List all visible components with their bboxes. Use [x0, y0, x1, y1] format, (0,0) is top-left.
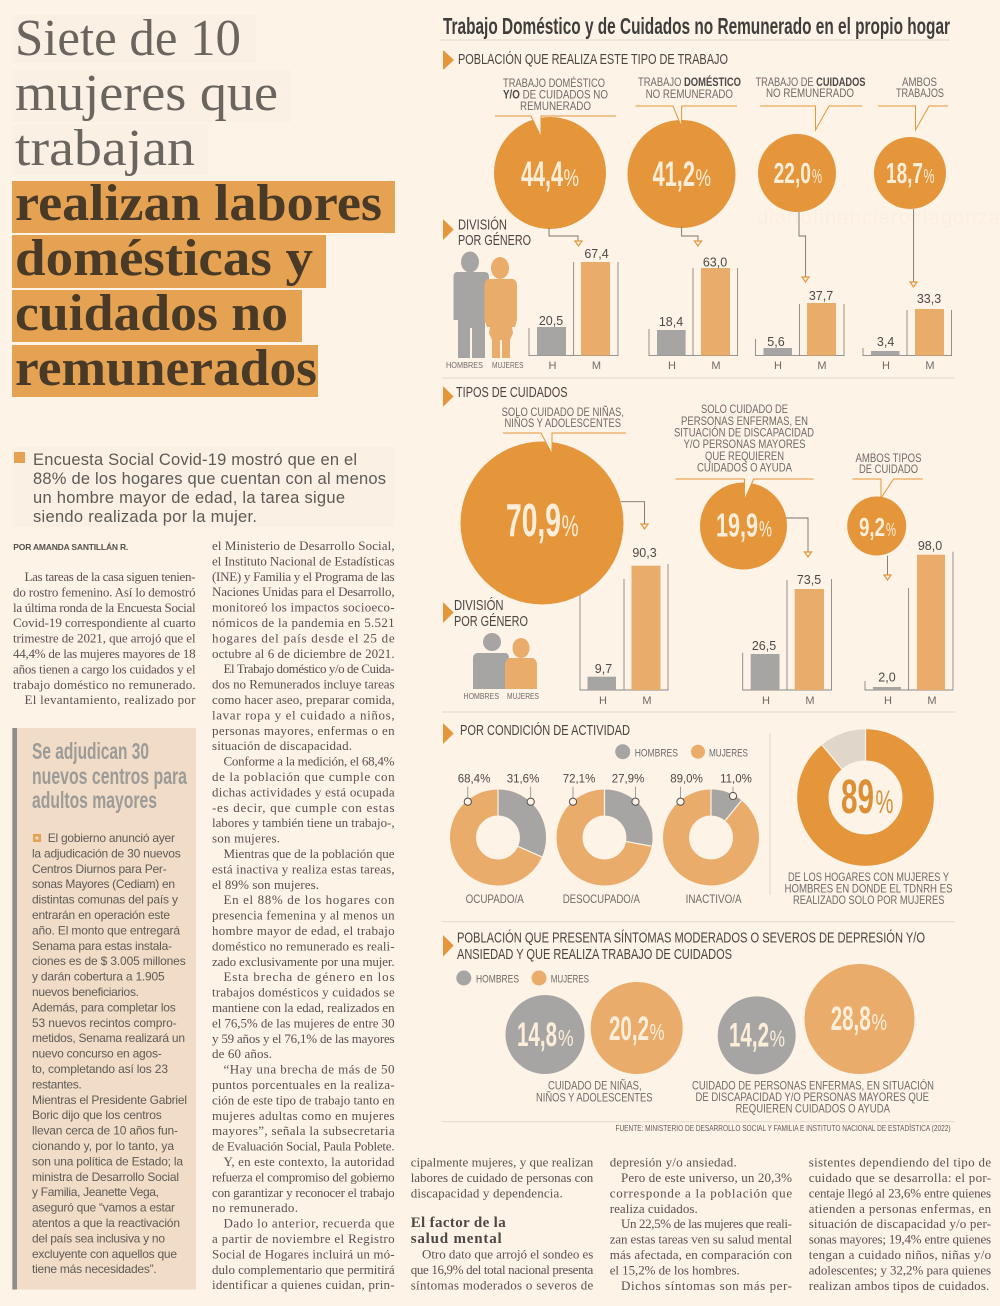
bubble: 19,9%: Y/O PERSONAS MAYORES — [684, 437, 806, 451]
bubble pair: cuidado de personas enfermas: REQUIEREN CUIDADOS O AYUDA — [736, 1102, 890, 1116]
article column 2: nómicos de la pandemia en 5.521 — [212, 615, 395, 630]
legend: HOMBRES — [635, 748, 678, 760]
legend: MUJERES — [709, 748, 748, 760]
sidebar text: nuevos beneficiarios. — [32, 985, 139, 999]
bubble: 9,2% — [847, 451, 923, 556]
bubble: 19,9%: PERSONAS ENFERMAS, EN — [681, 414, 808, 428]
sidebar text: año. El monto que entregará — [32, 923, 180, 937]
bubble: 9,2%: 9,2 — [859, 512, 885, 542]
bubble: 70,9%: % — [562, 510, 579, 543]
article column 2: dos no Remunerados incluye tareas — [212, 677, 395, 692]
article column 2: el Instituto Nacional de Estadísticas — [212, 553, 395, 568]
bubble: 22,0%: % — [812, 166, 822, 188]
bar chart: 41,2% por género: M — [711, 360, 721, 372]
bar chart: 44,4% por género: H — [549, 360, 557, 372]
donut: ocupado/a — [458, 774, 542, 906]
article column 2: mujeres adultas como en mujeres — [212, 1108, 395, 1123]
donut: 89% hogares: % — [876, 784, 894, 820]
subheading block: un hombre mayor de edad, la tarea sigue — [33, 489, 345, 507]
article column 2 — [212, 538, 395, 1292]
donut: inactivo/a: 89,0% — [670, 774, 703, 786]
bubble pair: cuidado de personas enfermas: DE DISCAPACIDAD Y/O PERSONAS MAYORES QUE — [696, 1090, 929, 1104]
sidebar text: ciones es de $ 3.005 millones — [32, 954, 186, 968]
article column 4: más afectada, en comparación con — [610, 1247, 793, 1262]
bar chart: 9,2% por género: 98,0 — [918, 539, 942, 553]
bar chart: 22,0% por género: 5,6 — [767, 335, 785, 349]
bubble pair: cuidado de niñas, niños y adolescentes: NIÑOS Y ADOLESCENTES — [536, 1090, 652, 1104]
article column 2: son mujeres. — [212, 831, 280, 846]
infographic page: diariofinanciero#lagonza — [757, 207, 1000, 229]
article column 2: lavar ropa y el cuidado a niños, — [212, 707, 395, 722]
sidebar text: aseguró que “vamos a estar — [32, 1201, 175, 1215]
bubble pair: cuidado de personas enfermas: CUIDADO DE PERSONAS ENFERMAS, EN SITUACIÓN — [692, 1078, 934, 1092]
title: remunerados — [15, 340, 317, 397]
article column 2: Social de Hogares incluirá un mó- — [212, 1246, 395, 1261]
title — [12, 10, 395, 397]
article column 2: el Ministerio de Desarrollo Social, — [212, 538, 395, 553]
panel: población que realiza este tipo de trabajo — [443, 50, 952, 372]
bubble: 41,2%: 41,2 — [652, 155, 695, 194]
legend — [615, 744, 748, 760]
article column 3: cipalmente mujeres, y que realizan — [411, 1155, 594, 1170]
byline: POR AMANDA SANTILLÁN R. — [13, 542, 128, 552]
bubble: 70,9%: NIÑOS Y ADOLESCENTES — [504, 416, 621, 430]
sidebar text: Centros Diurnos para Per- — [32, 862, 167, 876]
article column 2: “Hay una brecha de más de 50 — [224, 1062, 394, 1077]
section heading: síntomas — [443, 930, 925, 963]
donut: desocupado/a: 27,9% — [612, 774, 644, 786]
article column 2: dichas actividades y está ocupada — [212, 784, 395, 799]
panel: síntomas de depresión y ansiedad — [443, 930, 934, 1116]
bar chart: 18,7% por género: 33,3 — [917, 292, 941, 306]
title: cuidados no — [15, 285, 288, 342]
sidebar heading — [32, 738, 187, 813]
article column 2: con garantizar y reconocer el trabajo — [212, 1185, 395, 1200]
title: mujeres que — [15, 65, 278, 122]
section heading: población: POBLACIÓN QUE REALIZA ESTE TIPO DE TRABAJO — [458, 51, 728, 68]
article column 2: doméstico no remunerado es reali- — [212, 938, 395, 953]
bar chart: 18,7% por género: 3,4 — [877, 335, 894, 349]
article column 2: no remunerado. — [212, 1200, 298, 1215]
bubble: 44,4%: 44,4 — [521, 155, 563, 194]
panel: tipos de cuidados — [443, 384, 953, 707]
bar chart: 70,9% por género — [580, 546, 668, 707]
article column 5: atienden a personas enfermas, en — [809, 1201, 992, 1216]
title: domésticas y — [15, 230, 313, 287]
bubble pair: cuidado de personas enfermas — [692, 964, 934, 1116]
sidebar text: llevan cerca de 10 años fun- — [32, 1124, 178, 1138]
article column 1: Covid-19 correspondiente al cuarto — [13, 615, 196, 630]
article column 1: El levantamiento, realizado por — [24, 692, 196, 707]
sidebar text: atentos a que la reactivación — [32, 1216, 180, 1230]
bubble: 18,7% — [874, 75, 948, 209]
sidebar text: del país sea inclusiva y no — [32, 1231, 165, 1245]
bubble: 41,2%: % — [696, 165, 711, 192]
sidebar text: y darán cobertura a 1.905 — [32, 970, 165, 984]
bar chart: 41,2% por género: 63,0 — [703, 256, 727, 270]
article column 1 — [13, 569, 196, 707]
bar chart: 44,4% por género: M — [592, 360, 601, 372]
subheading block: Encuesta Social Covid-19 mostró que en el — [33, 451, 357, 469]
subheading: el factor de la salud mental: salud mental — [411, 1231, 502, 1247]
bar chart: 22,0% por género — [756, 289, 844, 372]
donut: 89% hogares: HOMBRES EN DONDE EL TDNRH ES — [784, 882, 952, 896]
bubble pair: cuidado de niñas, niños y adolescentes: CUIDADO DE NIÑAS, — [548, 1078, 642, 1092]
article column 4: Pero de este universo, un 20,3% — [621, 1170, 792, 1185]
bubble: 44,4%: TRABAJO DOMÉSTICO — [503, 75, 605, 90]
article column 2: ción de este tipo de trabajo tanto en — [212, 1092, 395, 1107]
icon: hombres y mujeres: MUJERES — [492, 361, 524, 370]
sidebar text: distintas comunas del país y — [32, 893, 178, 907]
article column 2: identificar a quienes cuidan, prin- — [212, 1277, 395, 1292]
icon: hombres y mujeres: HOMBRES — [464, 692, 499, 701]
bar chart: 22,0% por género: 37,7 — [809, 289, 833, 303]
article column 2: está inactiva y realiza estas tareas, — [212, 861, 395, 876]
article column 4: Dichos síntomas son más per- — [621, 1278, 792, 1293]
bar chart: 44,4% por género — [529, 247, 618, 372]
bar chart: 41,2% por género: 18,4 — [659, 315, 683, 329]
bar chart: 44,4% por género: 20,5 — [539, 314, 563, 328]
bar chart: 18,7% por género: H — [882, 360, 890, 372]
article column 4: Un 22,5% de las mujeres que reali- — [621, 1216, 792, 1231]
section heading: división por género — [443, 597, 528, 630]
bar chart: 19,9% por género — [743, 573, 832, 707]
icon: hombres y mujeres: HOMBRES — [446, 361, 483, 370]
bubble: 9,2%: % — [886, 520, 896, 540]
article column 2: presencia femenina y al menos un — [212, 908, 395, 923]
article column 2: labores y también tiene un trabajo-, — [212, 815, 395, 830]
bar chart: 41,2% por género: H — [668, 360, 676, 372]
bar chart: 19,9% por género: 26,5 — [752, 639, 776, 653]
donut: desocupado/a: DESOCUPADO/A — [563, 892, 640, 906]
bar chart: 9,2% por género: H — [884, 695, 892, 707]
article column 3 — [411, 1155, 594, 1292]
article column 2: monitoreó los impactos socioeco- — [212, 600, 395, 615]
bubble pair: cuidado de niñas, niños y adolescentes — [506, 982, 683, 1104]
bubble: 9,2%: DE CUIDADO — [859, 462, 918, 476]
arrow: 22,0% to bars — [799, 212, 809, 282]
article column 2: Y, en este contexto, la autoridad — [224, 1154, 395, 1169]
donut: 89% hogares: DE LOS HOGARES CON MUJERES Y — [788, 870, 949, 884]
article column 2: Mientras que de la población que — [224, 846, 395, 861]
article column 5: realizan ambos tipos de cuidados. — [809, 1278, 989, 1293]
bubble: 70,9%: SOLO CUIDADO DE NIÑAS, — [502, 405, 624, 419]
bubble: 19,9%: CUIDADOS O AYUDA — [697, 461, 792, 475]
section heading: tipos de cuidados: TIPOS DE CUIDADOS — [456, 384, 568, 401]
bubble: 22,0%: TRABAJO DE CUIDADOS — [756, 75, 866, 89]
arrow: 41,2% to bars — [682, 227, 702, 246]
bubble: 19,9%: % — [759, 517, 772, 542]
donut: 89% hogares: 89 — [841, 771, 874, 824]
sidebar bullet icon — [33, 834, 41, 842]
bubble: 44,4%: Y/O DE CUIDADOS NO — [503, 88, 608, 102]
article column 1: trabajo doméstico no remunerado. — [13, 677, 196, 692]
bubble: 44,4%: % — [564, 165, 579, 192]
article column 2: octubre al 6 de diciembre de 2021. — [212, 646, 395, 661]
sidebar text: Boric dijo que los centros — [32, 1108, 162, 1122]
bubble: 22,0%: 22,0 — [774, 158, 811, 190]
section heading: división por género: POR GÉNERO — [458, 232, 531, 249]
section heading: división por género: DIVISIÓN — [458, 216, 507, 234]
sidebar text: y Familia, Jeanette Vega, — [32, 1185, 159, 1199]
article column 2: situación de discapacidad. — [212, 738, 352, 753]
bar chart: 18,7% por género: M — [925, 360, 935, 372]
article column 4: realiza cuidados. — [610, 1201, 698, 1216]
article column 3: labores de cuidado de personas con — [411, 1170, 594, 1185]
article column 3: síntomas moderados o severos de — [411, 1277, 594, 1292]
legend: HOMBRES — [476, 974, 519, 986]
bar chart: 44,4% por género: 67,4 — [584, 247, 609, 261]
bar chart: 9,2% por género: 2,0 — [878, 671, 896, 685]
article column 2: El Trabajo doméstico y/o de Cuida- — [224, 661, 394, 676]
article column 5: sistentes dependiendo del tipo de — [809, 1155, 991, 1170]
donut: ocupado/a: OCUPADO/A — [466, 892, 524, 906]
bubble: 19,9%: 19,9 — [716, 507, 758, 544]
bar chart: 70,9% por género: 90,3 — [632, 546, 657, 560]
panel: por condición de actividad — [443, 722, 952, 907]
article column 2: dulo complementario que permitirá — [212, 1262, 395, 1277]
sidebar text: excluyente con aquellos que — [32, 1247, 177, 1261]
article column 2: Naciones Unidas para el Desarrollo, — [212, 584, 395, 599]
bubble: 70,9% — [460, 405, 626, 604]
bubble: 18,7%: 18,7 — [886, 158, 923, 190]
arrow: 70,9% to bars — [621, 502, 648, 529]
donut: 89% hogares: REALIZADO SOLO POR MUJERES — [793, 893, 944, 907]
bar chart: 70,9% por género: M — [642, 695, 652, 707]
bubble: 41,2% — [628, 74, 741, 228]
sidebar text: tiene más necesidades”. — [32, 1262, 157, 1276]
article column 2: el 76,5% de las mujeres de entre 30 — [212, 1015, 395, 1030]
section heading: división por género — [443, 216, 531, 249]
article column 5: cuidado que se desarrolla: el por- — [809, 1170, 991, 1185]
subheading block — [12, 447, 395, 527]
arrow: 9,2% to bars — [884, 556, 891, 580]
donut: inactivo/a: 11,0% — [720, 774, 752, 786]
article column 2: personas mayores, enfermas o en — [212, 723, 395, 738]
arrow: 44,4% to bars — [549, 228, 582, 246]
sidebar text: entrarán en operación este — [32, 908, 170, 922]
article column 2: trabajos domésticos y cuidados se — [212, 985, 395, 1000]
article column 2: de 60 años. — [212, 1046, 272, 1061]
sidebar heading: nuevos centros para — [32, 763, 187, 789]
article column 5: tengan a cuidado niños, niñas y/o — [809, 1247, 991, 1262]
bubble: 19,9%: SOLO CUIDADO DE — [701, 402, 788, 416]
title: trabajan — [15, 120, 195, 177]
bubble pair: cuidado de niñas, niños y adolescentes: % — [650, 1019, 665, 1045]
sidebar text: sonas Mayores (Cediam) en — [32, 877, 175, 891]
article column 2: mantiene con la edad, realizados en — [212, 1000, 395, 1015]
bubble: 41,2%: TRABAJO DOMÉSTICO — [638, 74, 741, 89]
donut: 89% hogares — [784, 729, 952, 907]
article column 2: Conforme a la medición, el 68,4% — [224, 754, 395, 769]
article column 2: hombre mayor de edad, el trabajo — [212, 923, 395, 938]
article column 4: corresponde a la población que — [610, 1185, 792, 1200]
bubble pair: cuidado de personas enfermas: 14,2 — [729, 1017, 769, 1055]
section heading: por condición de actividad: POR CONDICIÓN DE ACTIVIDAD — [460, 722, 630, 739]
bubble pair: cuidado de niñas, niños y adolescentes: % — [558, 1025, 574, 1051]
article column 3: que 16,9% del total nacional presenta — [411, 1262, 594, 1277]
article column 5: sonas mayores; 19,4% entre quienes — [809, 1232, 991, 1247]
article column 4 — [610, 1155, 793, 1293]
sidebar text: restantes. — [32, 1077, 82, 1091]
sidebar text: Además, para completar los — [32, 1000, 176, 1014]
bar chart: 9,2% por género — [865, 539, 953, 707]
icon: hombres y mujeres — [446, 252, 524, 370]
sidebar text: Senama para estas instala- — [32, 939, 172, 953]
article column 2: zado exclusivamente por una mujer. — [212, 954, 395, 969]
sidebar heading: Se adjudican 30 — [32, 738, 149, 764]
bubble pair: cuidado de personas enfermas: % — [770, 1026, 785, 1052]
sidebar text: la adjudicación de 30 nuevos — [32, 846, 181, 860]
article column 1: años tienen a cargo los cuidados y el — [13, 661, 196, 676]
bubble: 44,4%: REMUNERADO — [520, 99, 591, 113]
article column 2: mayores”, señala la subsecretaria — [212, 1123, 395, 1138]
section heading: población — [443, 50, 728, 70]
section heading: división por género: POR GÉNERO — [454, 613, 528, 630]
article column 1: do rostro femenino. Así lo demostró — [13, 584, 196, 599]
bar chart: 19,9% por género: 73,5 — [797, 573, 821, 587]
donut: inactivo/a: INACTIVO/A — [686, 892, 742, 906]
article column 4: zan estas tareas ven su salud mental — [610, 1232, 792, 1247]
donut: ocupado/a: 68,4% — [458, 774, 490, 786]
sidebar text: nuevo concurso en agos- — [32, 1047, 162, 1061]
bubble: 19,9% — [674, 402, 814, 570]
subheading: el factor de la salud mental — [411, 1215, 506, 1247]
legend — [456, 970, 589, 986]
subheading block: 88% de los hogares que cuentan con al menos — [33, 470, 386, 488]
bar chart: 9,2% por género: M — [927, 695, 937, 707]
bubble: 18,7%: % — [924, 166, 935, 188]
bar chart: 22,0% por género: H — [774, 360, 782, 372]
subheading block: siendo realizada por la mujer. — [33, 508, 257, 526]
article column 2: de la población que cumple con — [212, 769, 395, 784]
bubble pair: cuidado de personas enfermas: % — [872, 1009, 887, 1035]
arrow: 19,9% to bars — [786, 518, 812, 557]
bubble pair: cuidado de personas enfermas: 28,8 — [831, 1000, 871, 1038]
title: Siete de 10 — [15, 10, 241, 67]
bar chart: 70,9% por género: H — [599, 695, 607, 707]
bar chart: 19,9% por género: M — [805, 695, 815, 707]
article column 2: como hacer aseo, preparar comida, — [212, 692, 395, 707]
sidebar panel: nuevos centros — [12, 728, 196, 1290]
article column 1: 44,4% de las mujeres mayores de 18 — [13, 646, 196, 661]
bubble: 41,2%: NO REMUNERADO — [646, 87, 733, 101]
bubble: 18,7%: TRABAJOS — [896, 86, 944, 100]
sidebar text: 53 nuevos recintos compro- — [32, 1016, 177, 1030]
sidebar text: Mientras el Presidente Gabriel — [32, 1093, 187, 1107]
bubble pair: cuidado de niñas, niños y adolescentes: 14,8 — [517, 1016, 557, 1054]
sidebar text — [32, 831, 187, 1276]
donut: desocupado/a — [563, 774, 652, 906]
sidebar text: cionando y, por lo tanto, ya — [32, 1139, 174, 1153]
title: realizan labores — [15, 175, 382, 232]
article column 2: -es decir, que cumple con estas — [212, 800, 395, 815]
article column 5: adolescentes; y 32,2% para quienes — [809, 1262, 991, 1277]
bar chart: 19,9% por género: H — [762, 695, 770, 707]
article column 3: discapacidad y dependencia. — [411, 1185, 563, 1200]
bubble: 70,9%: 70,9 — [506, 494, 561, 546]
article column 5: situación de discapacidad y/o per- — [809, 1216, 991, 1231]
donut: desocupado/a: 72,1% — [563, 774, 595, 786]
article column 2: hogares del país desde el 25 de — [212, 630, 395, 645]
article column 1: Las tareas de la casa siguen tenien- — [24, 569, 196, 584]
bar chart: 70,9% por género: 9,7 — [595, 662, 612, 676]
section heading: síntomas: ANSIEDAD Y QUE REALIZA TRABAJO DE CUIDADOS — [457, 946, 732, 963]
sidebar text: son una política de Estado; la — [32, 1154, 183, 1168]
bubble: 22,0%: NO REMUNERADO — [766, 86, 854, 100]
donut: ocupado/a: 31,6% — [507, 774, 539, 786]
article column 2: de Evaluación Social, Paula Poblete. — [212, 1139, 395, 1154]
sidebar text: El gobierno anunció ayer — [48, 831, 175, 845]
bubble: 19,9%: QUE REQUIEREN — [705, 449, 784, 463]
article column 3: Otro dato que arrojó el sondeo es — [422, 1247, 593, 1262]
article column 5 — [809, 1155, 992, 1293]
bubble: 9,2%: AMBOS TIPOS — [856, 451, 922, 465]
bubble: 18,7%: AMBOS — [902, 75, 937, 89]
sidebar text: metidos, Senama realizará un — [32, 1031, 185, 1045]
section heading: tipos de cuidados — [443, 384, 568, 407]
bar chart: 18,7% por género — [863, 292, 952, 372]
bubble pair: cuidado de niñas, niños y adolescentes: 20,2 — [609, 1010, 649, 1048]
article column 2: el 89% son mujeres. — [212, 877, 319, 892]
arrow: 18,7% to bars — [910, 209, 917, 287]
icon: hombres y mujeres: MUJERES — [507, 692, 539, 701]
sidebar heading: adultos mayores — [32, 787, 157, 813]
bubble: 44,4% — [494, 75, 616, 229]
bar chart: 22,0% por género: M — [817, 360, 827, 372]
bubble: 22,0% — [756, 75, 866, 212]
article column 5: centaje llegó al 23,6% entre quienes — [809, 1185, 991, 1200]
icon: hombres y mujeres — [464, 633, 539, 701]
article column 1: la última ronda de la Encuesta Social — [13, 600, 196, 615]
article column 2: a partir de noviembre el Registro — [212, 1231, 395, 1246]
section heading: división por género: DIVISIÓN — [454, 597, 504, 614]
article column 2: puntos porcentuales en la realiza- — [212, 1077, 395, 1092]
donut: inactivo/a — [670, 774, 752, 906]
article column 2: Esta brecha de género en los — [224, 969, 394, 984]
section heading: por condición de actividad — [443, 722, 630, 744]
sidebar text: ministra de Desarrollo Social — [32, 1170, 179, 1184]
bubble: 19,9%: SITUACIÓN DE DISCAPACIDAD — [674, 425, 814, 440]
sidebar text: to, completando así los 23 — [32, 1062, 168, 1076]
article column 2: En el 88% de los hogares con — [224, 892, 395, 907]
article column 4: el 15,2% de los hombres. — [610, 1262, 740, 1277]
article column 2: refuerza el compromiso del gobierno — [212, 1169, 395, 1184]
article column 2: Dado lo anterior, recuerda que — [224, 1216, 395, 1231]
article column 4: depresión y/o ansiedad. — [610, 1155, 737, 1170]
article column 2: (INE) y Familia y el Programa de las — [212, 569, 395, 584]
legend: MUJERES — [551, 974, 589, 986]
bar chart: 41,2% por género — [649, 256, 738, 372]
article column 1: trimestre de 2021, que arrojó que el — [13, 631, 196, 646]
article column 2: y 59 años y el 76,1% de las mayores — [212, 1031, 395, 1046]
subheading: el factor de la salud mental: El factor de la — [411, 1215, 506, 1231]
